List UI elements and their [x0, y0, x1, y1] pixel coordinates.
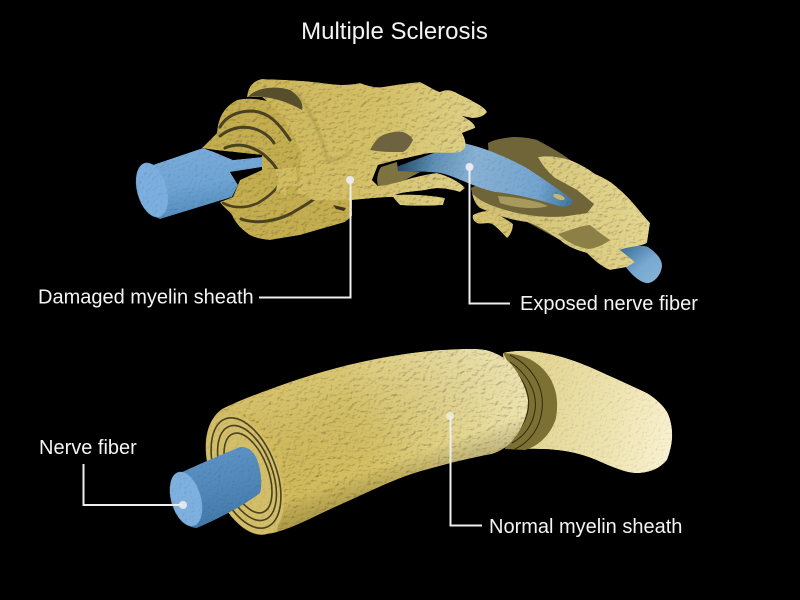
- ring arcs: [510, 355, 542, 449]
- illustration: normal nerve: [164, 349, 672, 546]
- label: normal myelin sheath: Normal myelin sheath: [489, 516, 682, 538]
- title: Multiple Sclerosis: [301, 18, 488, 45]
- loose sheath fragment: [473, 211, 513, 238]
- inner light fold below fiber: [498, 196, 548, 208]
- exposed nerve fiber tail: [618, 246, 662, 283]
- right section dark inner sleeve: [471, 137, 600, 245]
- ring block fragment: [275, 167, 298, 196]
- inner rings between sections: [503, 353, 557, 450]
- flap edge shadow: [296, 92, 352, 162]
- lower window behind fiber: [377, 162, 420, 186]
- label: normal myelin sheath: [446, 412, 682, 538]
- olive contact shadow: [503, 353, 557, 450]
- left nerve fiber: [136, 148, 262, 219]
- sheath cut end spiral rings: [190, 400, 300, 546]
- dark gaps between rings: [220, 111, 314, 222]
- ring body of damaged sheath: [202, 99, 352, 240]
- upper window in sheath: [370, 132, 413, 152]
- exposed nerve fiber: [396, 143, 573, 207]
- concentric lines: [197, 408, 295, 538]
- label: exposed nerve fiber: Exposed nerve fiber: [520, 293, 698, 315]
- lower fold in right section: [558, 225, 610, 249]
- small sheath island on fiber: [553, 193, 565, 201]
- label: damaged myelin sheath: [38, 176, 354, 308]
- tube edge shading: [222, 349, 528, 532]
- label: exposed nerve fiber: [466, 163, 698, 315]
- right sheath section: [503, 351, 672, 473]
- nerve fiber bottom: [171, 447, 261, 528]
- right section yellow front flap: [472, 156, 650, 270]
- label: nerve fiber: [39, 437, 187, 509]
- sheath overhang dark interior: [248, 88, 302, 110]
- label: damaged myelin sheath: Damaged myelin sheath: [38, 286, 254, 308]
- label: nerve fiber: Nerve fiber: [39, 437, 137, 459]
- left nerve fiber cut end: [130, 159, 174, 221]
- outer ring face: [190, 400, 300, 546]
- left sheath tube: [207, 349, 528, 534]
- small tear in sheath: [333, 205, 346, 211]
- illustration: damaged nerve: [130, 79, 662, 283]
- main damaged sheath flap: [247, 79, 487, 206]
- nerve fiber bottom cut end: [164, 468, 208, 530]
